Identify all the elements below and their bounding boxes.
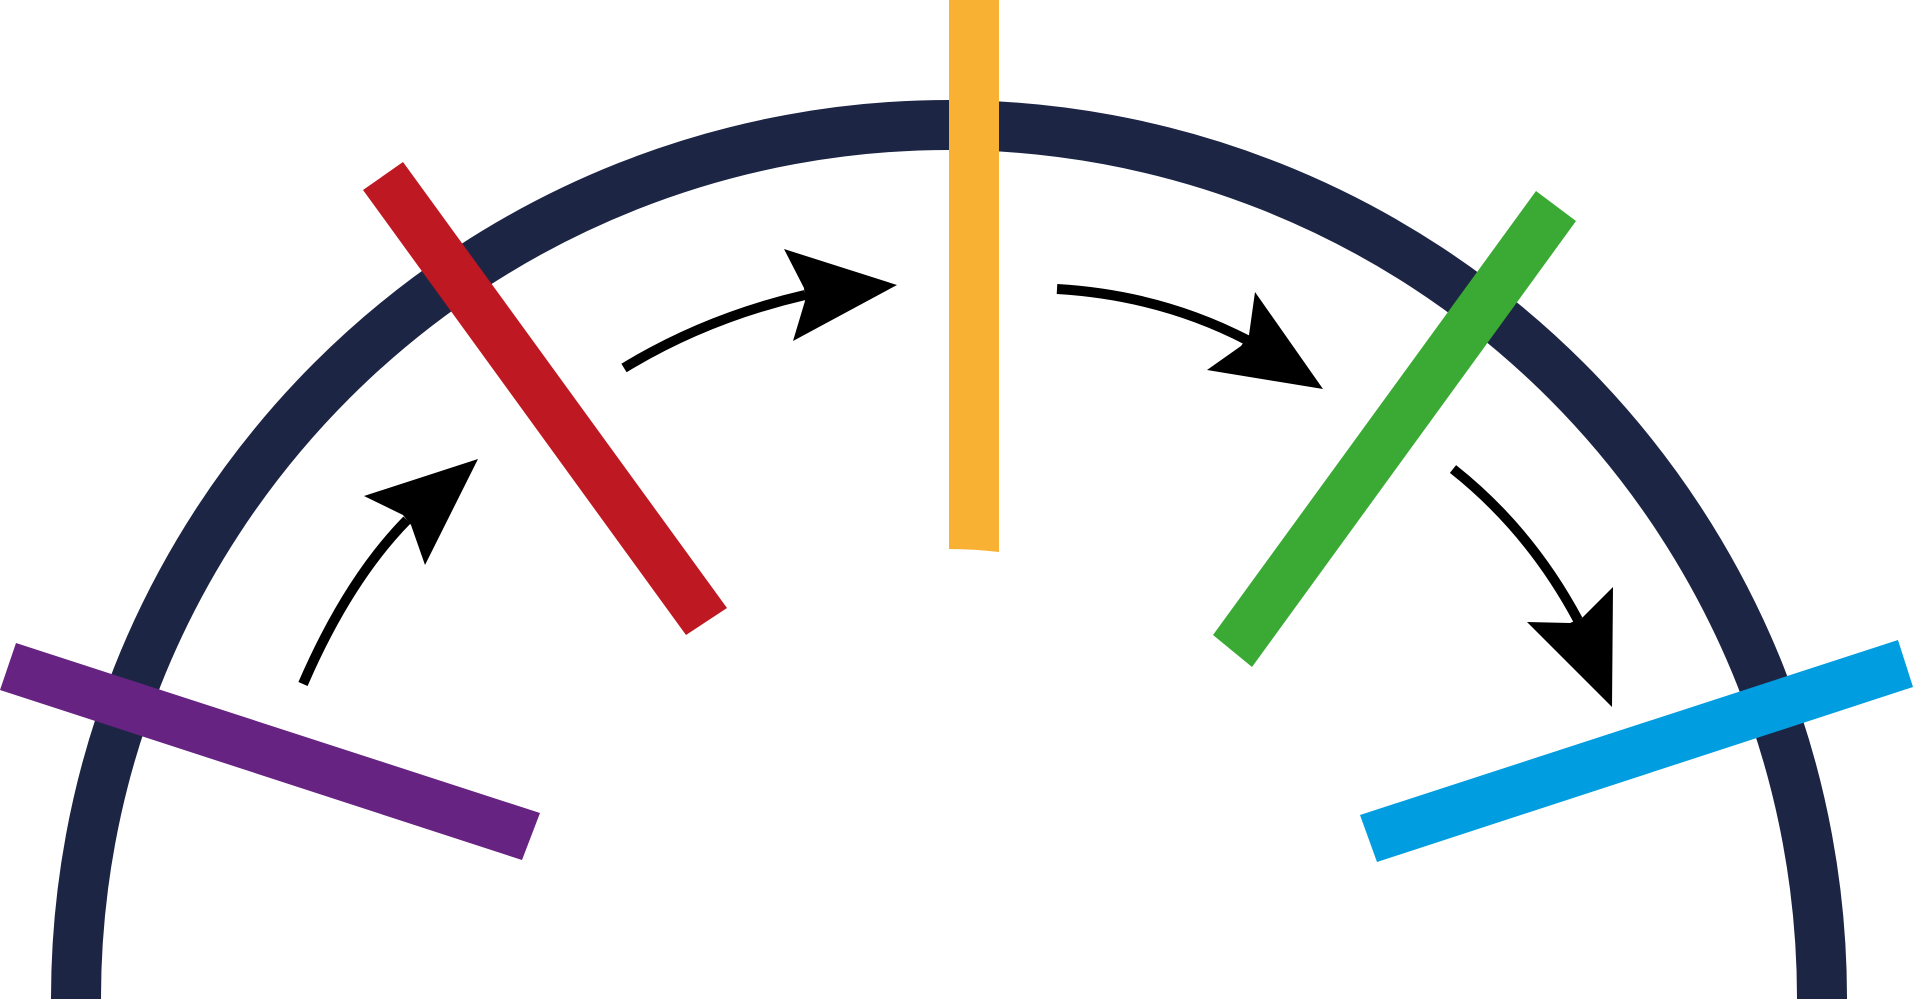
arrow 2 [624,249,897,368]
arrow 3 [1057,289,1323,389]
navy arc [76,125,1822,999]
blue bar [1360,640,1913,862]
red bar [363,162,727,635]
arrow 1 [303,459,478,684]
purple bar [0,643,540,860]
green bar [1213,191,1576,667]
arrow 4 [1453,469,1613,707]
yellow bar [949,0,999,552]
